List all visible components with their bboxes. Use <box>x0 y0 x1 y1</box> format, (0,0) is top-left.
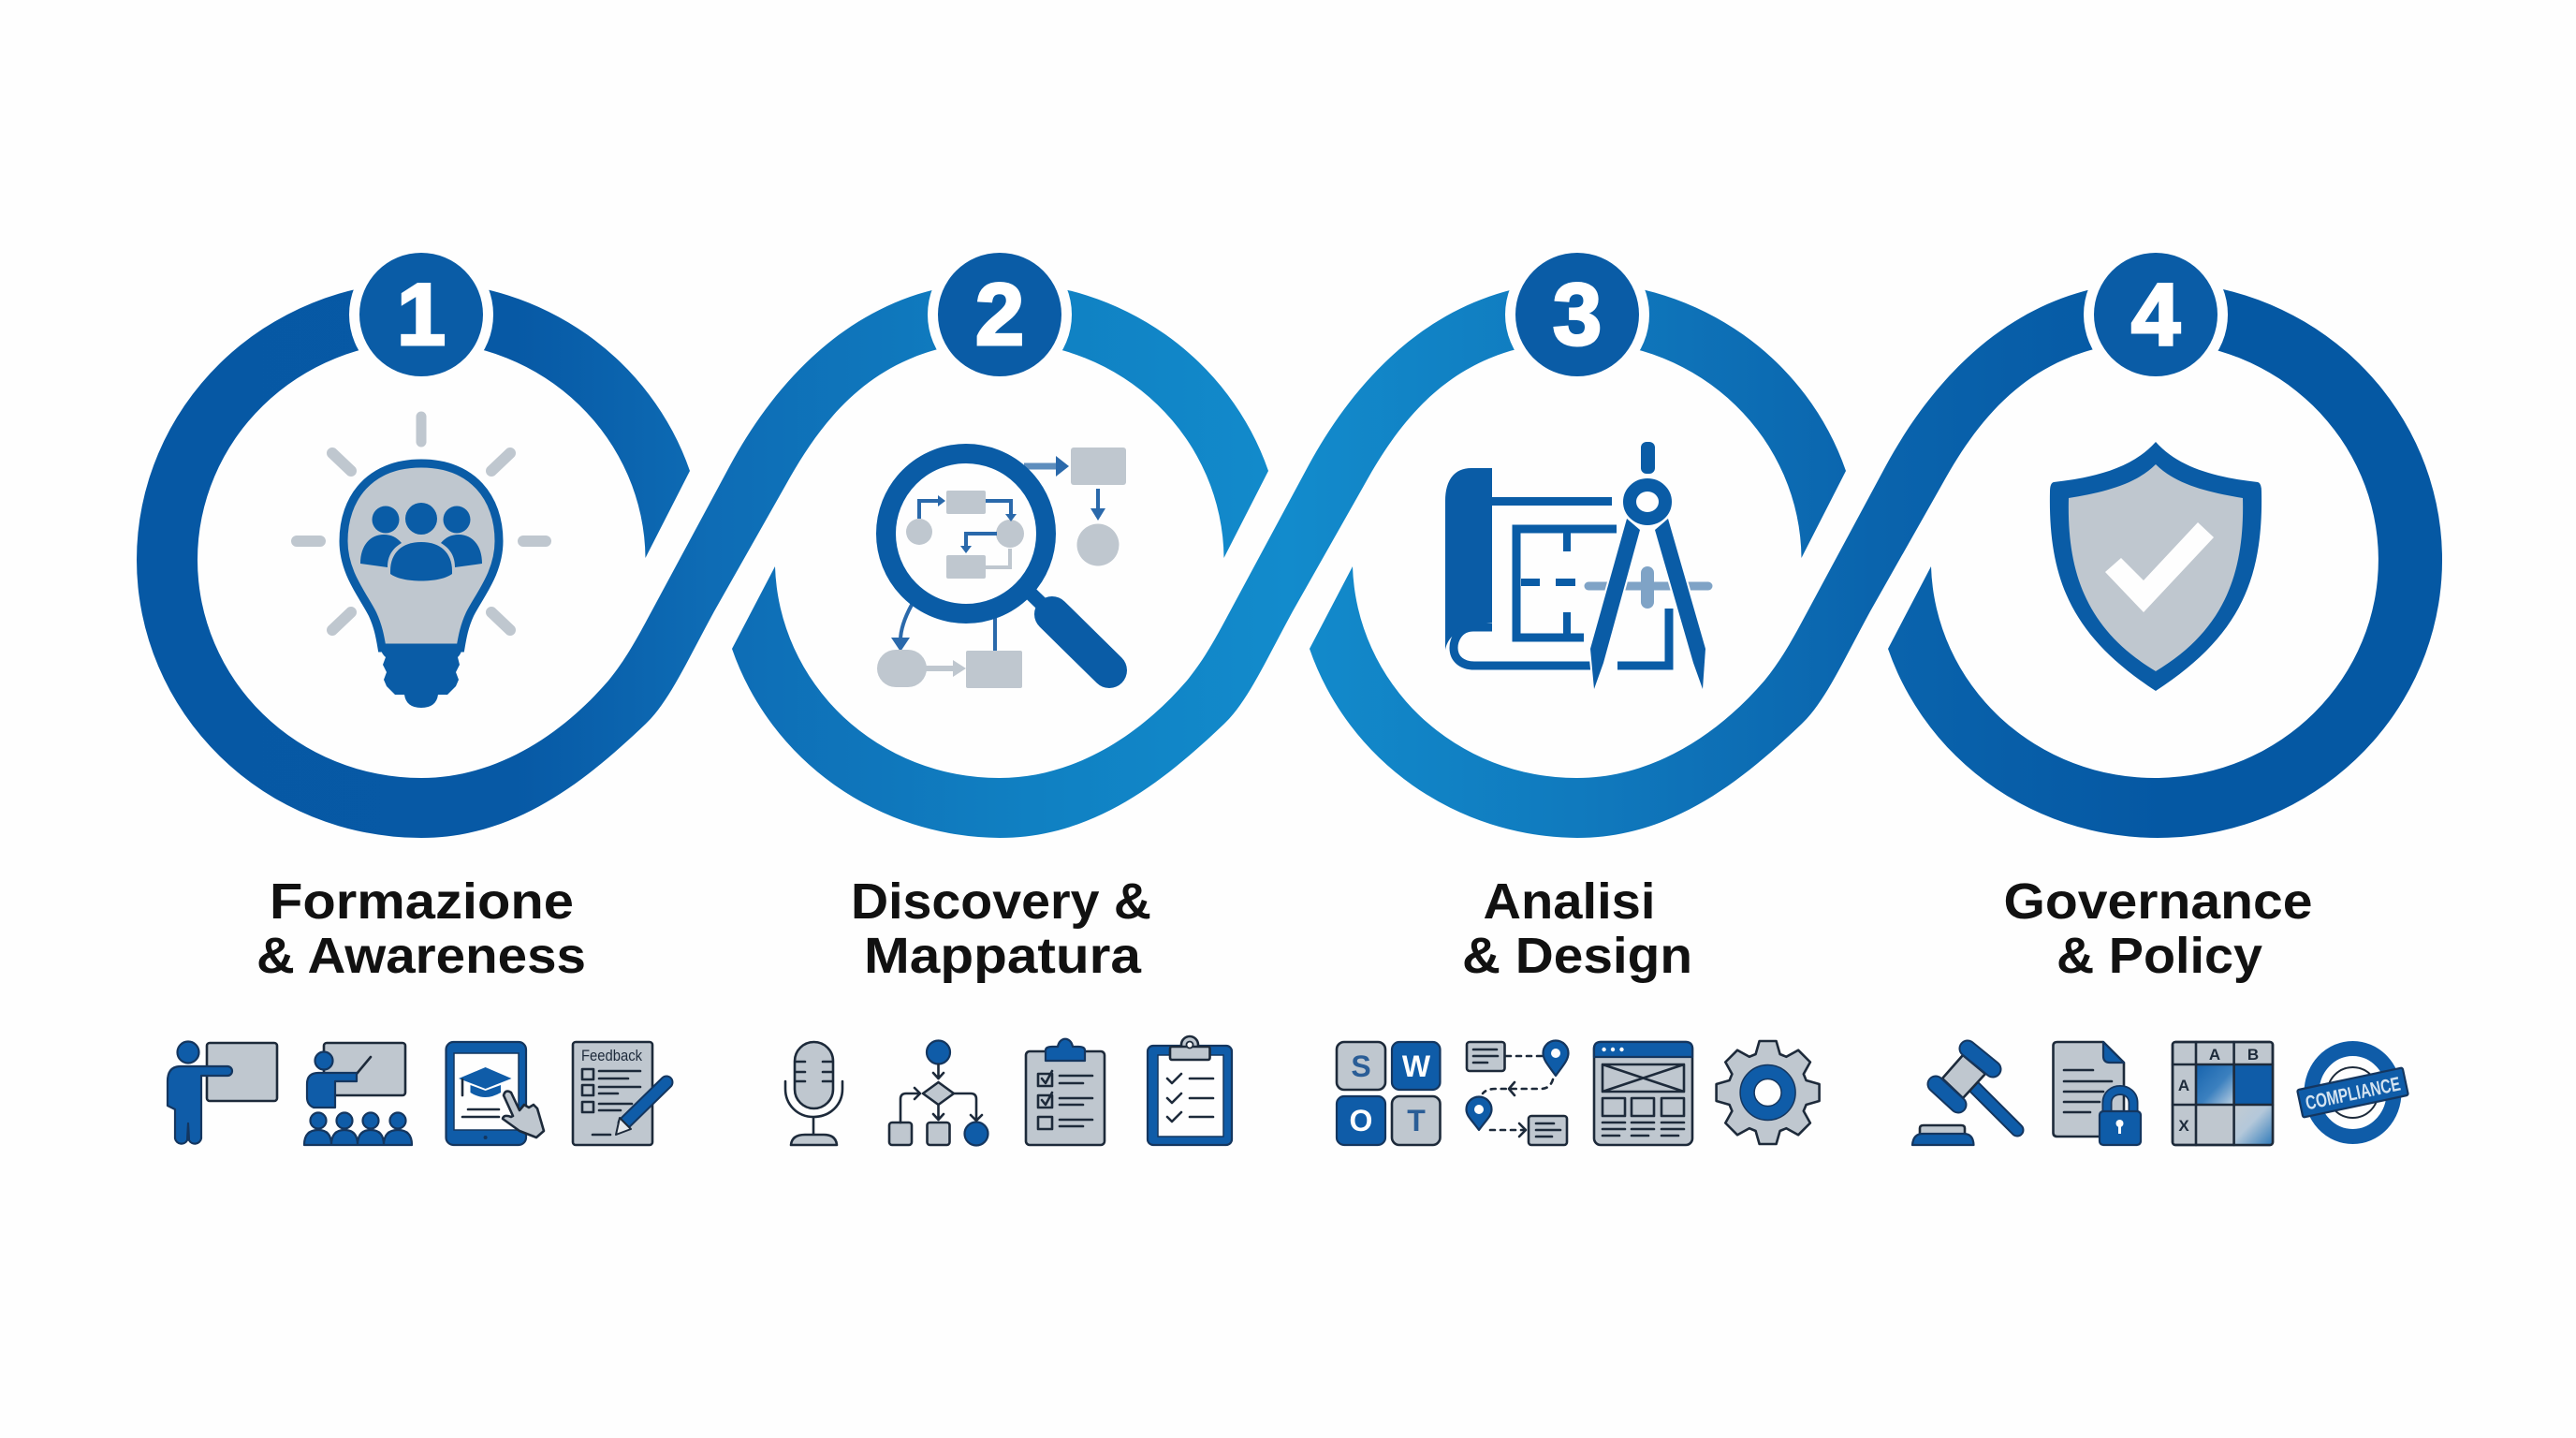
icon: risk matrix: A <box>2178 1077 2189 1094</box>
heading: Analisi & Design: Analisi <box>1483 873 1655 930</box>
icon: SWOT matrix <box>1337 1042 1440 1145</box>
step badge 1: 1 <box>397 265 446 363</box>
icon: gear <box>1717 1041 1820 1144</box>
icon: SWOT matrix: W <box>1402 1049 1431 1083</box>
icon: magnifier over process map <box>877 448 1126 688</box>
icon: gavel <box>1912 1049 2017 1145</box>
icon: risk matrix: B <box>2247 1046 2259 1064</box>
heading: Governance & Policy: & Policy <box>2056 928 2262 984</box>
step badge 4: 4 <box>2131 265 2180 363</box>
icon: journey map <box>1466 1041 1569 1145</box>
icon: SWOT matrix: T <box>1407 1104 1426 1137</box>
step badge 2: 2 <box>975 265 1024 363</box>
icon: SWOT matrix: O <box>1350 1104 1372 1137</box>
icon: risk matrix: X <box>2178 1117 2189 1135</box>
icon: feedback form: Feedback <box>581 1047 642 1064</box>
heading: Discovery & Mappatura: Discovery & <box>851 873 1151 930</box>
heading: Analisi & Design: & Design <box>1462 928 1692 984</box>
step badge 2 <box>928 242 1072 387</box>
step badge 4 <box>2084 242 2228 387</box>
icon: flow chart <box>889 1041 988 1146</box>
icon: light bulb with people <box>297 417 546 708</box>
icon: microphone <box>785 1042 842 1145</box>
icon: checklist clipboard blue <box>1148 1036 1232 1145</box>
icon: secured document <box>2054 1042 2141 1145</box>
icon: SWOT matrix: S <box>1351 1049 1371 1083</box>
heading: Formazione & Awareness: & Awareness <box>256 928 586 984</box>
icon: feedback form <box>573 1042 666 1145</box>
icon: presenter at board <box>168 1041 277 1144</box>
icon: compliance stamp: COMPLIANCE <box>2304 1074 2403 1114</box>
step badge 3 <box>1505 242 1649 387</box>
icon: wireframe window <box>1594 1042 1692 1145</box>
icon: tablet e-learning <box>446 1042 544 1145</box>
heading: Governance & Policy: Governance <box>2003 873 2312 930</box>
flowing ribbon connecting the four steps <box>137 289 2443 838</box>
icon: risk matrix: A <box>2209 1046 2220 1064</box>
icon: compliance stamp <box>2297 1049 2408 1137</box>
icon: teacher with audience <box>304 1043 412 1145</box>
icon: shield with check <box>2050 442 2261 691</box>
icon: blueprint with compass <box>1445 442 1708 689</box>
heading: Formazione & Awareness: Formazione <box>270 873 574 930</box>
step badge 3: 3 <box>1553 265 1602 363</box>
icon: checklist clipboard gray <box>1026 1039 1105 1145</box>
step badge 1 <box>349 242 493 387</box>
icon: risk matrix <box>2173 1042 2273 1145</box>
heading: Discovery & Mappatura: Mappatura <box>864 928 1142 984</box>
